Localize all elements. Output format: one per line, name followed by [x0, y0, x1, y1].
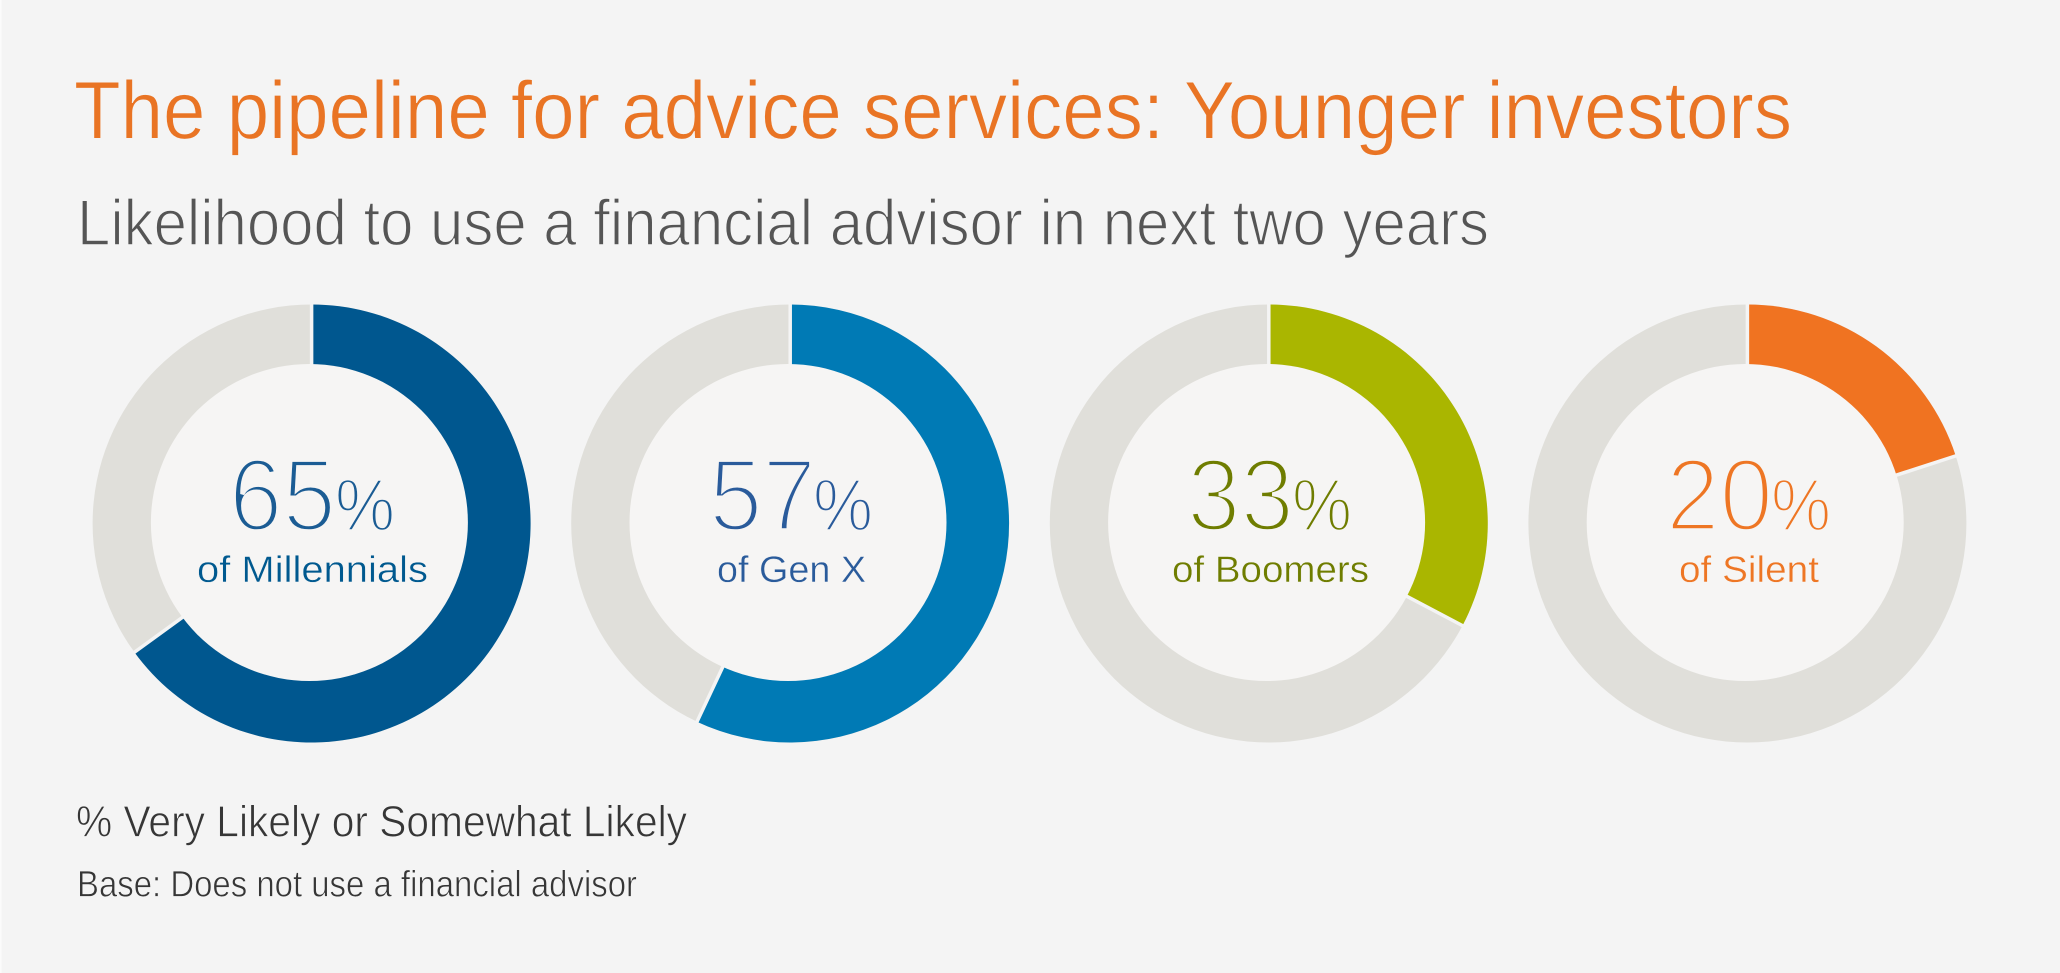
donut chart: Boomers 33%: [1050, 300, 1488, 742]
label: of Gen X: of Gen X: [717, 549, 866, 590]
value: 65%: 65: [229, 438, 336, 553]
donut chart: Gen X 57%: [571, 300, 1009, 742]
label: of Silent: of Silent: [1679, 549, 1820, 590]
label: of Boomers: of Boomers: [1172, 549, 1369, 590]
label: of Millennials: of Millennials: [197, 549, 428, 590]
footnote: measure: % Very Likely or Somewhat Likely: [76, 798, 687, 847]
value: 33%: 33: [1187, 438, 1294, 553]
subtitle: Likelihood to use a financial advisor in next two years: [77, 186, 1489, 259]
value: 65%: [229, 438, 395, 553]
title: The pipeline for advice services: Younger investors: [74, 66, 1792, 157]
value: 57%: 57: [709, 438, 816, 553]
value: 65%: %: [335, 464, 395, 547]
donut chart: Millennials 65%: [93, 300, 531, 742]
value: 20%: %: [1771, 464, 1831, 547]
value: 33%: [1187, 438, 1352, 553]
value: 57%: %: [813, 464, 873, 547]
value: 57%: [709, 438, 873, 553]
footnote: base: Base: Does not use a financial advisor: [77, 864, 637, 905]
value: 33%: %: [1292, 464, 1352, 547]
value: 20%: [1666, 438, 1831, 553]
donut chart: Silent 20%: [1528, 300, 1966, 742]
value: 20%: 20: [1666, 438, 1773, 553]
